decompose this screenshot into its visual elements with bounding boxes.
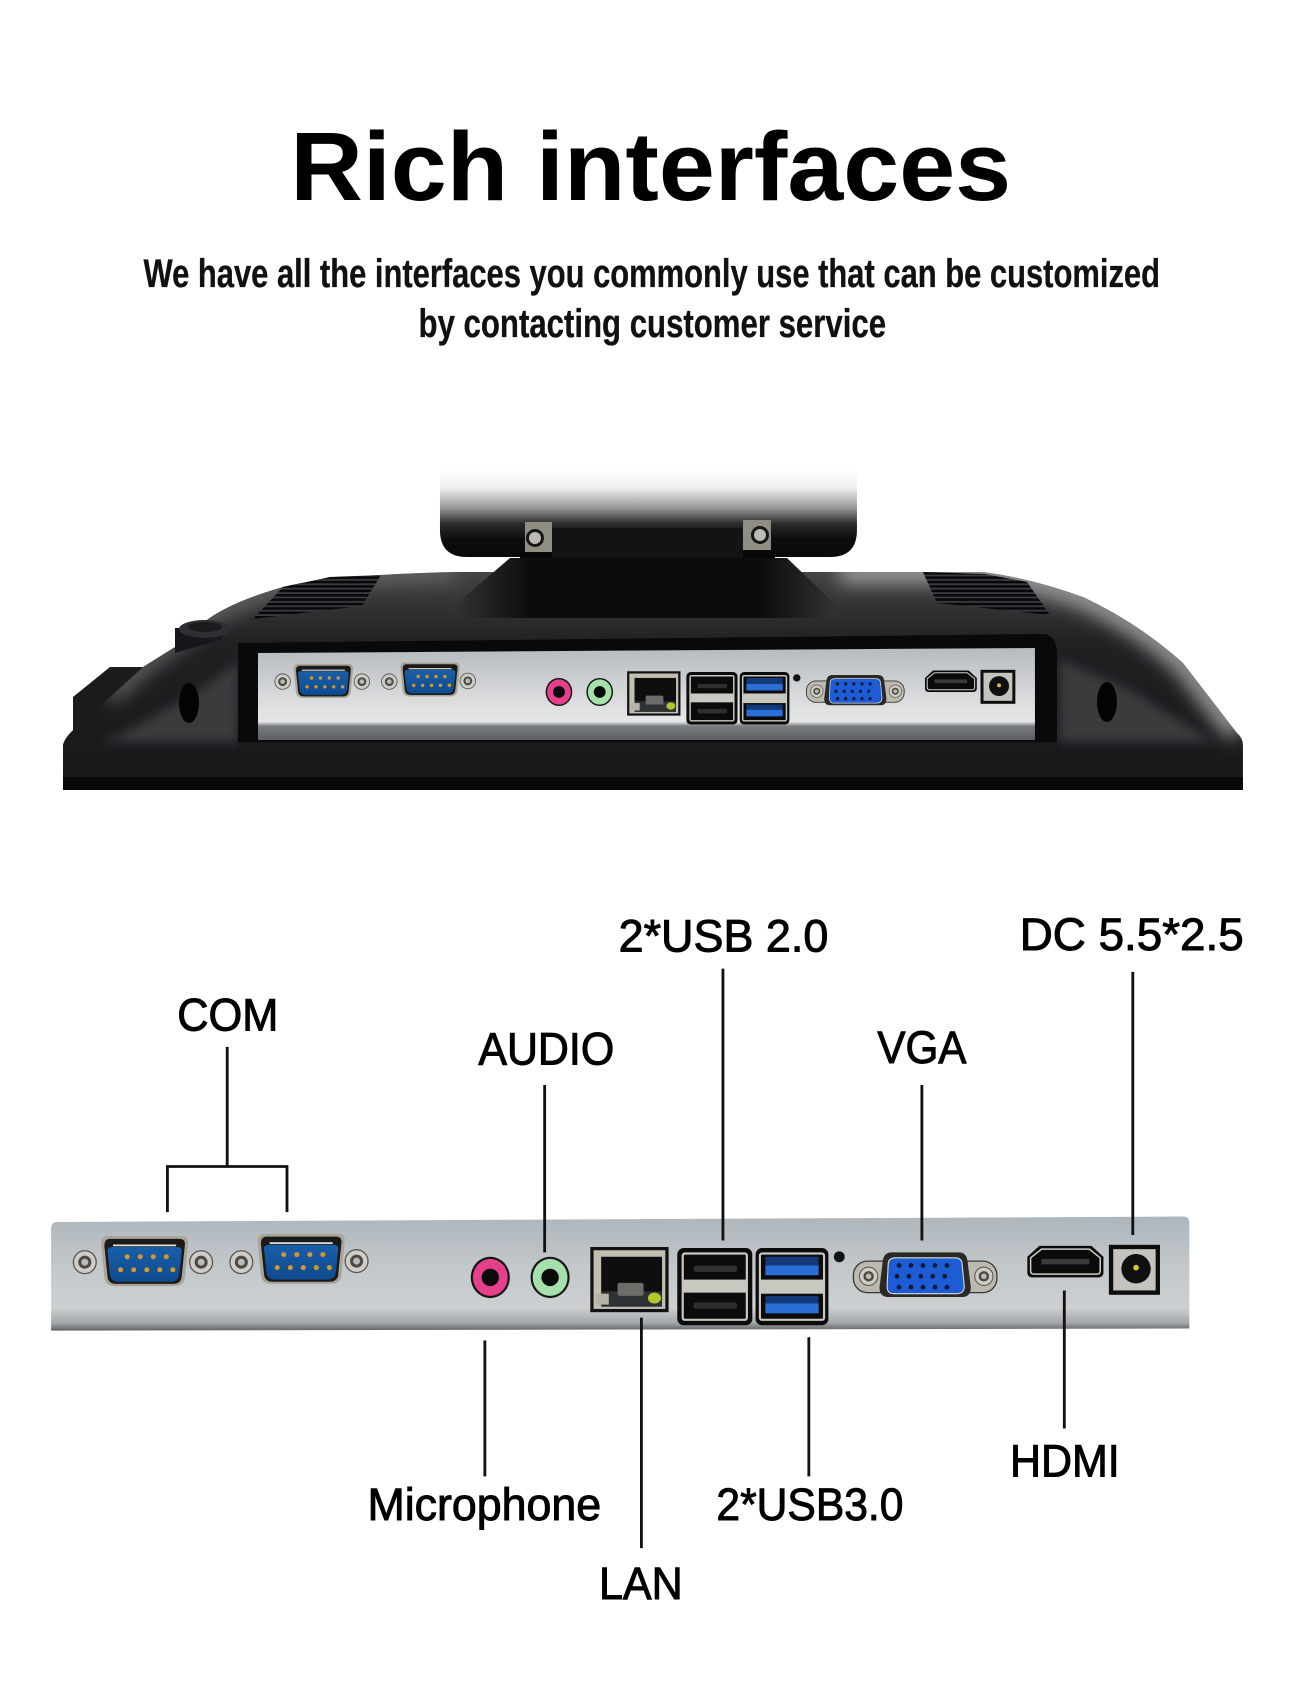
port: LAN xyxy=(590,1247,669,1312)
callout: COM: COM xyxy=(177,990,278,1041)
rear module xyxy=(73,667,143,732)
subtitle xyxy=(144,251,1160,346)
side hole right xyxy=(1097,682,1117,722)
port: audio jack xyxy=(531,1257,570,1298)
product photo: monitor back with ports xyxy=(63,470,1243,790)
callout: AUDIO: AUDIO xyxy=(478,1023,614,1074)
port recess xyxy=(238,634,1057,742)
port: DC power xyxy=(1109,1245,1160,1295)
port: COM 1 xyxy=(73,1236,213,1286)
shell highlight xyxy=(100,572,1237,742)
stand base xyxy=(453,558,838,618)
monitor shell xyxy=(63,470,1243,790)
port: VGA xyxy=(853,1252,997,1297)
all ports xyxy=(73,1234,1160,1325)
port: microphone jack xyxy=(471,1257,510,1298)
callout: 2*USB 2.0: 2*USB 2.0 xyxy=(619,910,828,961)
port: HDMI xyxy=(1027,1246,1103,1277)
callout: Microphone: Microphone xyxy=(367,1479,601,1530)
vent right xyxy=(923,572,1050,615)
upper ports xyxy=(275,662,1015,725)
power button xyxy=(175,620,231,653)
callout: 2*USB3.0: 2*USB3.0 xyxy=(716,1479,903,1530)
indicator dot xyxy=(834,1251,845,1262)
port: USB 2.0 xyxy=(677,1248,752,1325)
bottom bezel xyxy=(63,777,1243,790)
callout: LAN: LAN xyxy=(599,1558,683,1609)
labelled port panel xyxy=(51,1217,1189,1331)
screw plate left xyxy=(525,522,552,552)
screw plate right xyxy=(743,520,771,550)
side hole left xyxy=(179,683,199,723)
upper port plate xyxy=(258,648,1035,740)
port: USB 3.0 xyxy=(756,1248,828,1325)
callout: VGA: VGA xyxy=(877,1022,967,1073)
port: COM 2 xyxy=(230,1234,368,1284)
title: Rich interfaces xyxy=(290,111,1011,221)
callout: HDMI: HDMI xyxy=(1010,1435,1120,1486)
vent left xyxy=(253,575,381,619)
monitor body xyxy=(63,572,1243,790)
monitor stand xyxy=(440,470,857,570)
metal plate xyxy=(51,1217,1189,1331)
subtitle: by contacting customer service xyxy=(419,301,886,346)
callout: DC 5.5*2.5: DC 5.5*2.5 xyxy=(1020,909,1244,960)
callout: COM xyxy=(167,990,287,1212)
